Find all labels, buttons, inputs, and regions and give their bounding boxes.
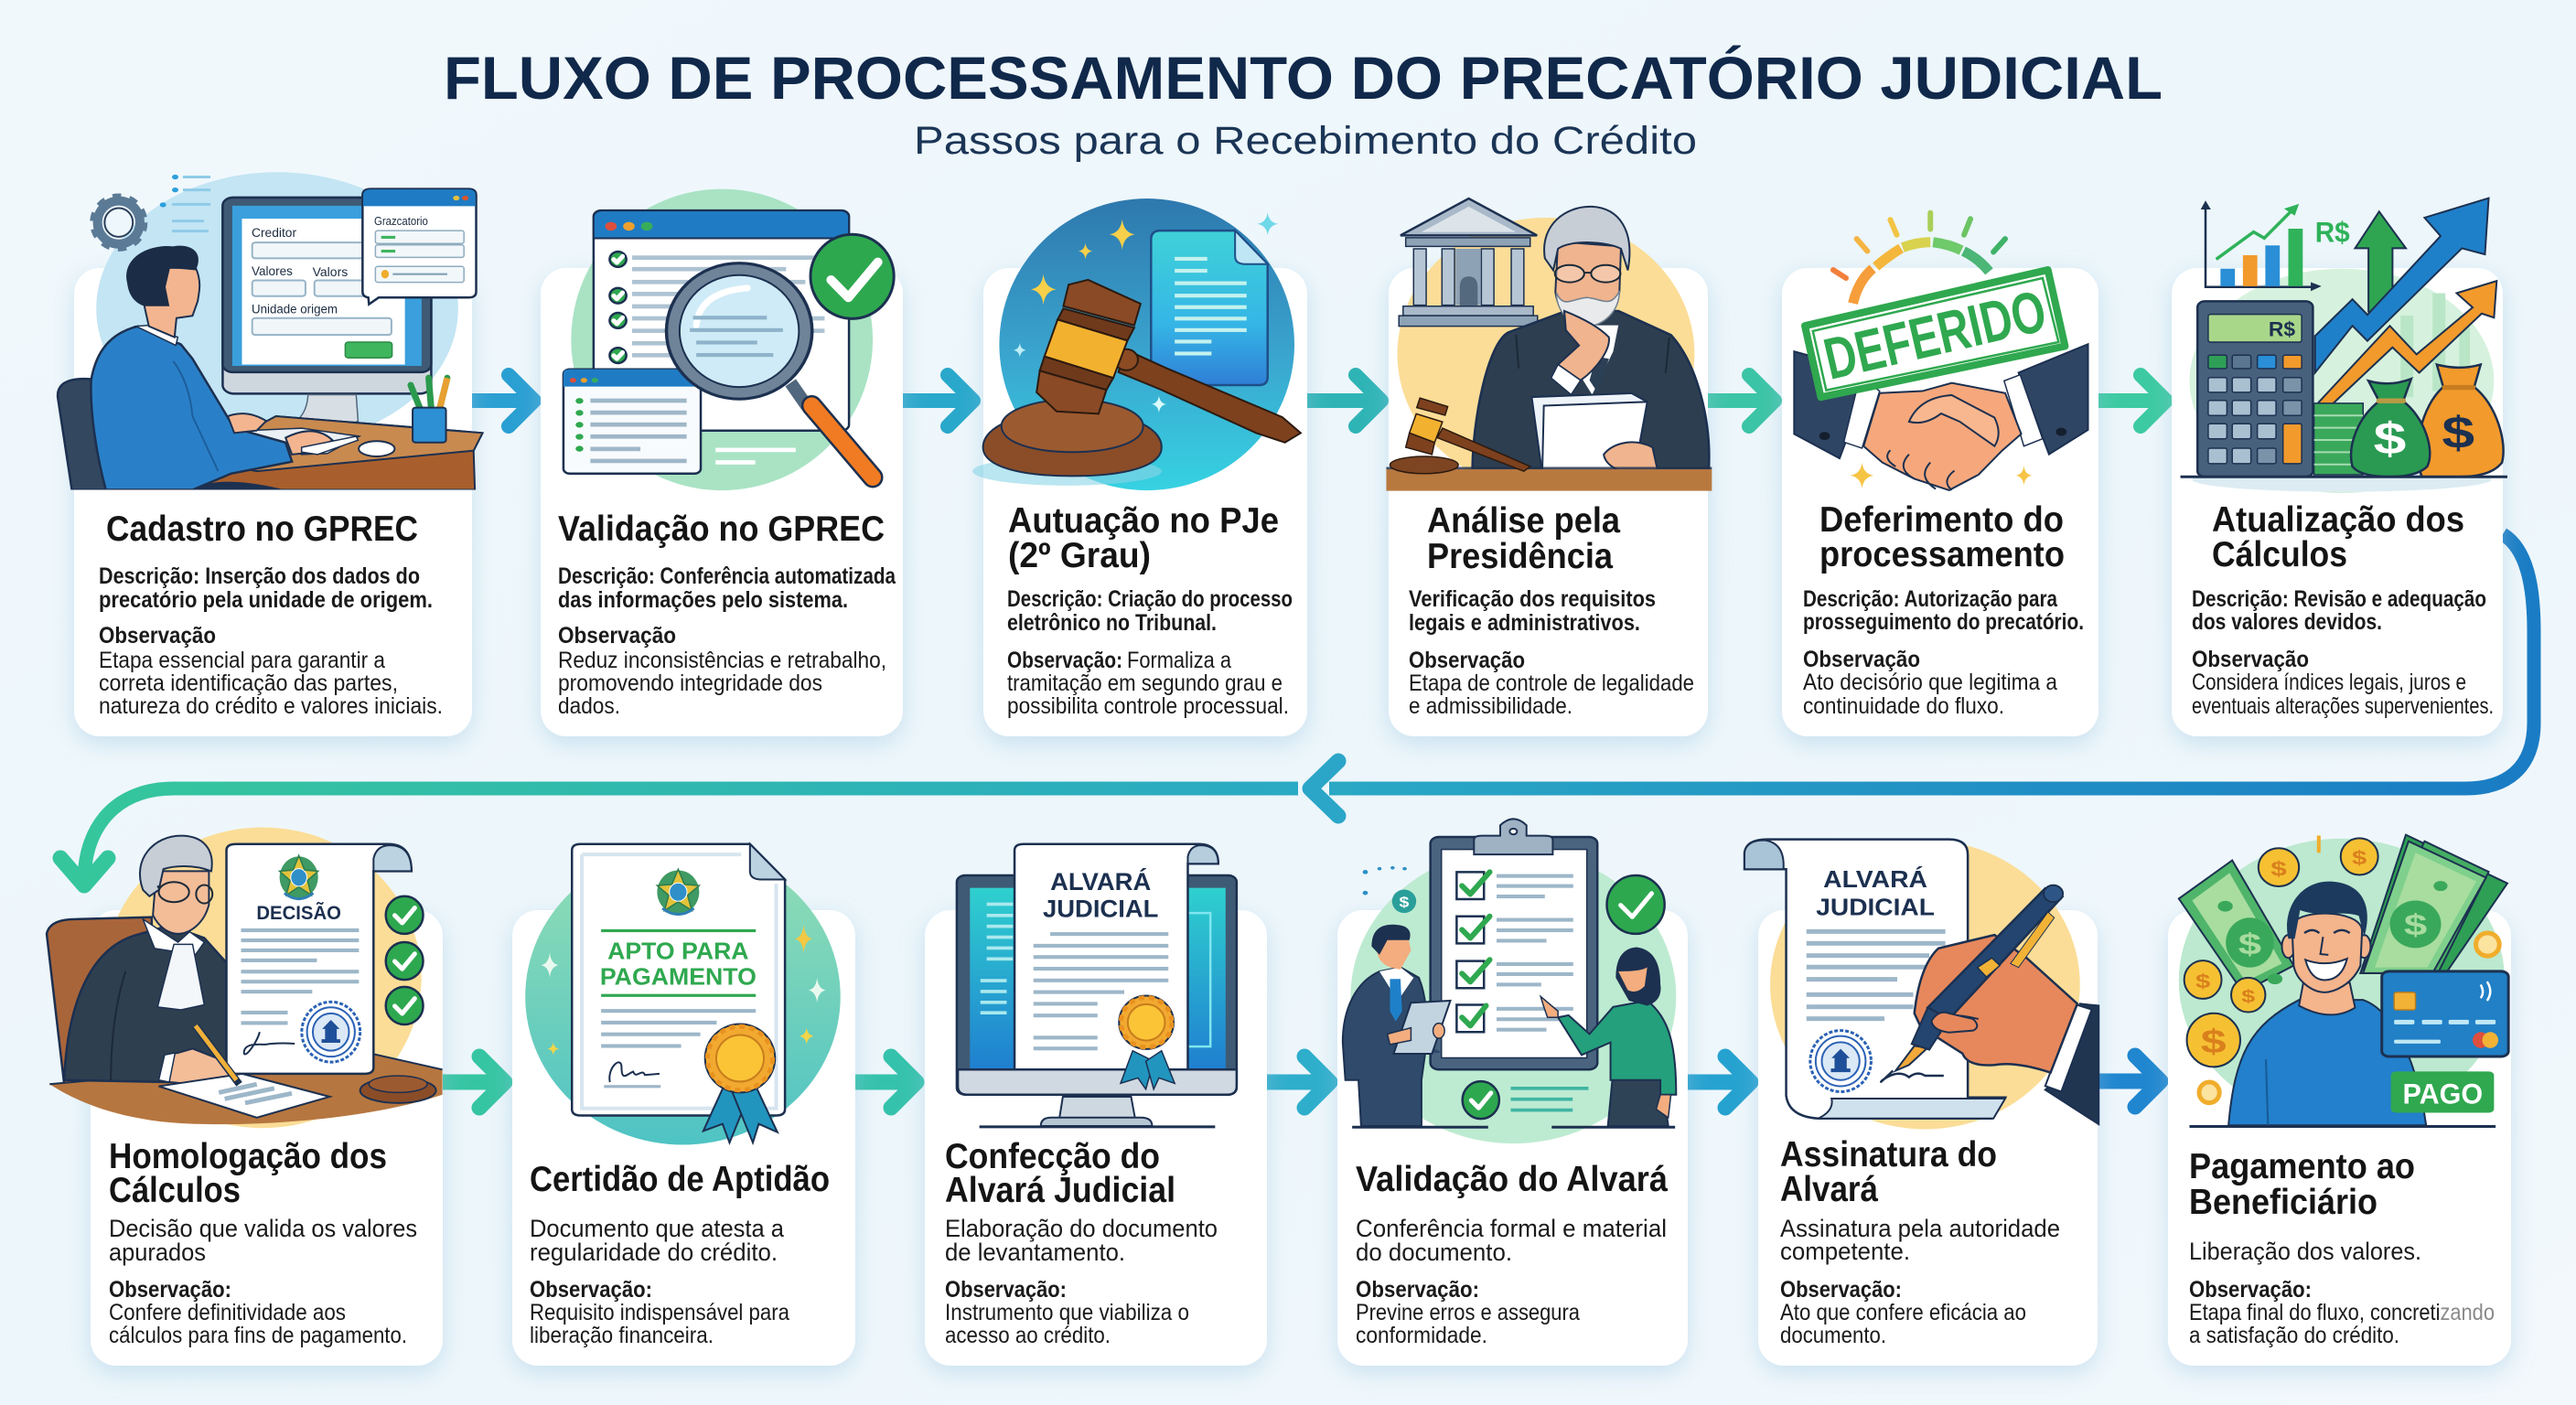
observation text: Observação: [1356, 1277, 1479, 1303]
card 7 background [91, 910, 443, 1366]
connector arrow: from row 1 to row 2 [60, 534, 2534, 885]
panel: step 4 Análise pela Presidência [1386, 198, 1712, 736]
observation text: conformidade. [1356, 1323, 1487, 1348]
panel: step 8 Certidão de Aptidão [512, 844, 855, 1366]
description text: precatório pela unidade de origem. [99, 587, 433, 613]
arrow 2 [903, 375, 973, 426]
card 5 background [1782, 268, 2098, 736]
heading [109, 1137, 387, 1210]
illustration: happy beneficiary with money, card and PAGO: $ [2270, 857, 2287, 880]
arrow 1 [472, 375, 534, 426]
illustration: calculator, growth arrows and money bags: R$ [2315, 216, 2350, 249]
heading: Alvará [1780, 1170, 1878, 1209]
heading [2189, 1147, 2415, 1222]
heading: Cadastro no GPREC [106, 509, 418, 549]
description text: prosseguimento do precatório. [1803, 609, 2084, 635]
observation text: Confere definitividade aos [109, 1300, 346, 1325]
arrow 5 [2098, 375, 2166, 426]
description text: Descrição: Criação do processo [1007, 586, 1293, 612]
observation text [945, 1277, 1189, 1348]
heading: Análise pela [1427, 501, 1620, 541]
description text: Descrição: Revisão e adequação [2192, 586, 2486, 612]
description text: Elaboração do documento [945, 1215, 1218, 1242]
heading: Homologação dos [109, 1137, 387, 1176]
observation text: natureza do crédito e valores iniciais. [99, 693, 443, 719]
observation text: Instrumento que viabiliza o [945, 1300, 1189, 1325]
arrow 8 [1267, 1056, 1330, 1108]
heading: processamento [1819, 535, 2065, 574]
panel: step 9 Confecção do Alvará Judicial [925, 844, 1267, 1366]
heading: Validação do Alvará [1356, 1160, 1668, 1199]
arrow 6 [443, 1056, 505, 1108]
description text: Descrição: Autorização para [1803, 586, 2058, 612]
panel: step 12 Pagamento ao Beneficiário [2168, 835, 2511, 1366]
observation text: cálculos para fins de pagamento. [109, 1323, 407, 1348]
observation text: Ato decisório que legitima a [1803, 670, 2057, 695]
observation text: Observação: [945, 1277, 1067, 1303]
description text [1356, 1215, 1667, 1266]
description text: legais e administrativos. [1409, 610, 1640, 636]
heading: Assinatura do [1780, 1135, 1997, 1174]
illustration: handshake with Deferido stamp [1794, 213, 2088, 490]
illustration: judge signing decision: DECISÃO [256, 901, 341, 924]
observation text: Etapa final do fluxo, concretizando [2189, 1300, 2495, 1325]
observation text: dados. [558, 693, 620, 719]
observation text [558, 623, 886, 719]
illustration: person at computer: Grazcatorio [374, 215, 428, 228]
observation text: Formaliza a [1127, 648, 1231, 673]
observation text: Observação: [530, 1277, 652, 1303]
illustration: hand signing Alvará scroll: JUDICIAL [1816, 894, 1935, 920]
description text: Conferência formal e material [1356, 1215, 1667, 1242]
card 8 background [512, 910, 855, 1366]
card 9 background [925, 910, 1267, 1366]
illustration: calculator, growth arrows and money bags: $ [2374, 414, 2406, 465]
illustration: happy beneficiary with money, card and PAGO: $ [2404, 908, 2427, 942]
card 4 background [1389, 268, 1708, 736]
observation text: Observação [1409, 648, 1525, 673]
description text: Liberação dos valores. [2189, 1238, 2421, 1265]
panel: step 6 Atualização dos Cálculos [2172, 198, 2507, 736]
observation text: acesso ao crédito. [945, 1323, 1111, 1348]
illustration: clipboard checklist with two people: $ [1400, 895, 1410, 910]
description text [558, 563, 896, 613]
description text [530, 1215, 785, 1266]
description text: de levantamento. [945, 1239, 1125, 1266]
illustration: happy beneficiary with money, card and PAGO [2179, 835, 2508, 1127]
panel: step 11 Assinatura do Alvará [1744, 840, 2098, 1366]
observation text: Etapa de controle de legalidade [1409, 670, 1694, 696]
description text: Decisão que valida os valores [109, 1215, 417, 1242]
illustration: person at computer: Valors [313, 264, 348, 279]
observation text [2192, 647, 2494, 719]
illustration: gavel with digital document [972, 198, 1301, 490]
heading: Beneficiário [2189, 1183, 2377, 1222]
heading: Alvará Judicial [945, 1171, 1175, 1210]
illustration: certificate Apto para Pagamento: APTO PARA [607, 938, 749, 964]
observation text: Observação [1803, 647, 1920, 672]
observation text [109, 1277, 407, 1348]
panel: step 5 Deferimento do processamento [1782, 213, 2098, 736]
heading: Cálculos [2212, 535, 2347, 574]
illustration: hand signing Alvará scroll: ALVARÁ [1823, 866, 1927, 893]
observation text [99, 623, 443, 719]
description text: Assinatura pela autoridade [1780, 1215, 2060, 1242]
observation text: correta identificação das partes, [99, 670, 398, 696]
description text [109, 1215, 417, 1266]
observation text: Observação: [109, 1277, 231, 1303]
description text [2192, 586, 2486, 635]
observation text [530, 1277, 789, 1348]
observation text: eventuais alterações supervenientes. [2192, 693, 2494, 719]
observation text [1007, 648, 1289, 719]
observation text: Observação: [2189, 1277, 2312, 1303]
subtitle: Passos para o Recebimento do Crédito [914, 119, 1697, 163]
arrow 4 [1708, 375, 1775, 426]
illustration: calculator, growth arrows and money bags: $ [2442, 408, 2474, 458]
observation text: possibilita controle processual. [1007, 693, 1289, 719]
observation text: Previne erros e assegura [1356, 1300, 1580, 1325]
arrow 3 [1307, 375, 1381, 426]
description text: regularidade do crédito. [530, 1239, 778, 1266]
heading: Deferimento do [1819, 500, 2064, 540]
description text: dos valores devidos. [2192, 609, 2382, 635]
description text [1780, 1215, 2060, 1265]
heading: Atualização dos [2212, 500, 2464, 540]
illustration: hand signing Alvará scroll [1744, 840, 2098, 1129]
description text [1803, 586, 2084, 635]
heading: Pagamento ao [2189, 1147, 2415, 1186]
illustration: happy beneficiary with money, card and PAGO: $ [2241, 986, 2255, 1006]
observation text: Etapa essencial para garantir a [99, 648, 385, 673]
illustration: clipboard checklist with two people [1343, 819, 1676, 1143]
illustration: happy beneficiary with money, card and PAGO: $ [2238, 928, 2261, 960]
panel: step 7 Homologação dos Cálculos [47, 827, 443, 1366]
heading [945, 1137, 1175, 1210]
observation text: tramitação em segundo grau e [1007, 670, 1283, 696]
illustration: person at computer: Unidade origem [252, 302, 338, 316]
observation text: Observação: [1780, 1277, 1902, 1303]
heading [1780, 1135, 1997, 1209]
heading: Cálculos [109, 1171, 241, 1210]
arrow 7 [855, 1056, 917, 1108]
title: FLUXO DE PROCESSAMENTO DO PRECATÓRIO JUDICIAL [444, 44, 2163, 112]
observation text [2189, 1277, 2495, 1348]
illustration: calculator, growth arrows and money bags [2181, 198, 2507, 493]
card 3 background [983, 268, 1307, 736]
card 11 background [1758, 910, 2098, 1366]
observation text: promovendo integridade dos [558, 670, 822, 696]
arrow 9 [1688, 1056, 1751, 1108]
illustration: certificate Apto para Pagamento [525, 844, 841, 1144]
description text: do documento. [1356, 1239, 1512, 1266]
panel: step 3 Autuação no PJe [972, 198, 1307, 736]
heading: Presidência [1427, 537, 1613, 576]
heading [1008, 501, 1279, 575]
heading: Certidão de Aptidão [530, 1160, 830, 1199]
heading: Autuação no PJe [1008, 501, 1279, 541]
description text: eletrônico no Tribunal. [1007, 610, 1217, 636]
observation text: a satisfação do crédito. [2189, 1323, 2399, 1348]
arrow 10 [2098, 1056, 2161, 1107]
illustration: monitor with Alvará Judicial document: JUDICIAL [1043, 896, 1158, 923]
card 2 background [541, 268, 903, 736]
illustration: calculator, growth arrows and money bags: R$ [2269, 317, 2296, 340]
description text [945, 1215, 1218, 1266]
description text: Descrição: Inserção dos dados do [99, 563, 420, 589]
observation text: Reduz inconsistências e retrabalho, [558, 648, 886, 673]
description text: competente. [1780, 1238, 1910, 1265]
card 10 background [1337, 910, 1688, 1366]
card 12 background [2168, 910, 2511, 1366]
panel: step 10 Validação do Alvará [1337, 819, 1688, 1366]
illustration: person at computer: Valores [252, 264, 293, 279]
illustration: person at computer [58, 172, 483, 490]
illustration: magnifier over browser windows [564, 189, 894, 490]
illustration: happy beneficiary with money, card and PAGO: $ [2195, 971, 2210, 992]
illustration: judge with courthouse [1386, 198, 1712, 491]
description text: Descrição: Conferência automatizada [558, 563, 896, 589]
heading: Validação no GPREC [558, 509, 885, 549]
observation text: Observação: [1007, 648, 1122, 673]
observation text: documento. [1780, 1323, 1886, 1348]
heading [2212, 500, 2464, 574]
illustration: monitor with Alvará Judicial document: ALVARÁ [1050, 868, 1151, 896]
observation text: liberação financeira. [530, 1323, 714, 1348]
observation text: Ato que confere eficácia ao [1780, 1300, 2026, 1325]
description text: Verificação dos requisitos [1409, 586, 1656, 612]
illustration: judge signing decision [47, 827, 443, 1128]
observation text [1356, 1277, 1580, 1348]
illustration: person at computer: Creditor [252, 225, 296, 240]
description text: apurados [109, 1239, 206, 1266]
illustration: happy beneficiary with money, card and PAGO: PAGO [2402, 1078, 2483, 1110]
observation text [1409, 648, 1694, 719]
stamp text: DEFERIDO [1818, 277, 2052, 392]
observation text: Requisito indispensável para [530, 1300, 789, 1325]
illustration: monitor with Alvará Judicial document [957, 844, 1237, 1127]
heading: Confecção do [945, 1137, 1160, 1176]
card 6 background [2172, 268, 2503, 736]
panel: step 1 Cadastro no GPREC [58, 172, 483, 736]
illustration: happy beneficiary with money, card and PAGO: $ [2352, 848, 2367, 869]
observation text: Observação [99, 623, 216, 649]
panel: step 2 Validação no GPREC [541, 189, 903, 736]
observation text: Observação [558, 623, 676, 649]
observation text: Considera índices legais, juros e [2192, 670, 2466, 695]
description text: das informações pelo sistema. [558, 587, 848, 613]
description text [99, 563, 433, 613]
observation text [1780, 1277, 2026, 1348]
observation text: e admissibilidade. [1409, 693, 1572, 719]
illustration: certificate Apto para Pagamento: PAGAMENTO [600, 964, 757, 990]
description text: Documento que atesta a [530, 1215, 785, 1242]
heading [1427, 501, 1620, 576]
description text [1007, 586, 1293, 636]
heading [1819, 500, 2065, 574]
observation text [1803, 647, 2057, 719]
illustration: happy beneficiary with money, card and PAGO: $ [2201, 1024, 2227, 1060]
observation text: continuidade do fluxo. [1803, 693, 2004, 719]
card 1 background [74, 268, 472, 736]
observation text: Observação [2192, 647, 2309, 672]
description text [1409, 586, 1656, 636]
heading: (2º Grau) [1008, 536, 1151, 575]
